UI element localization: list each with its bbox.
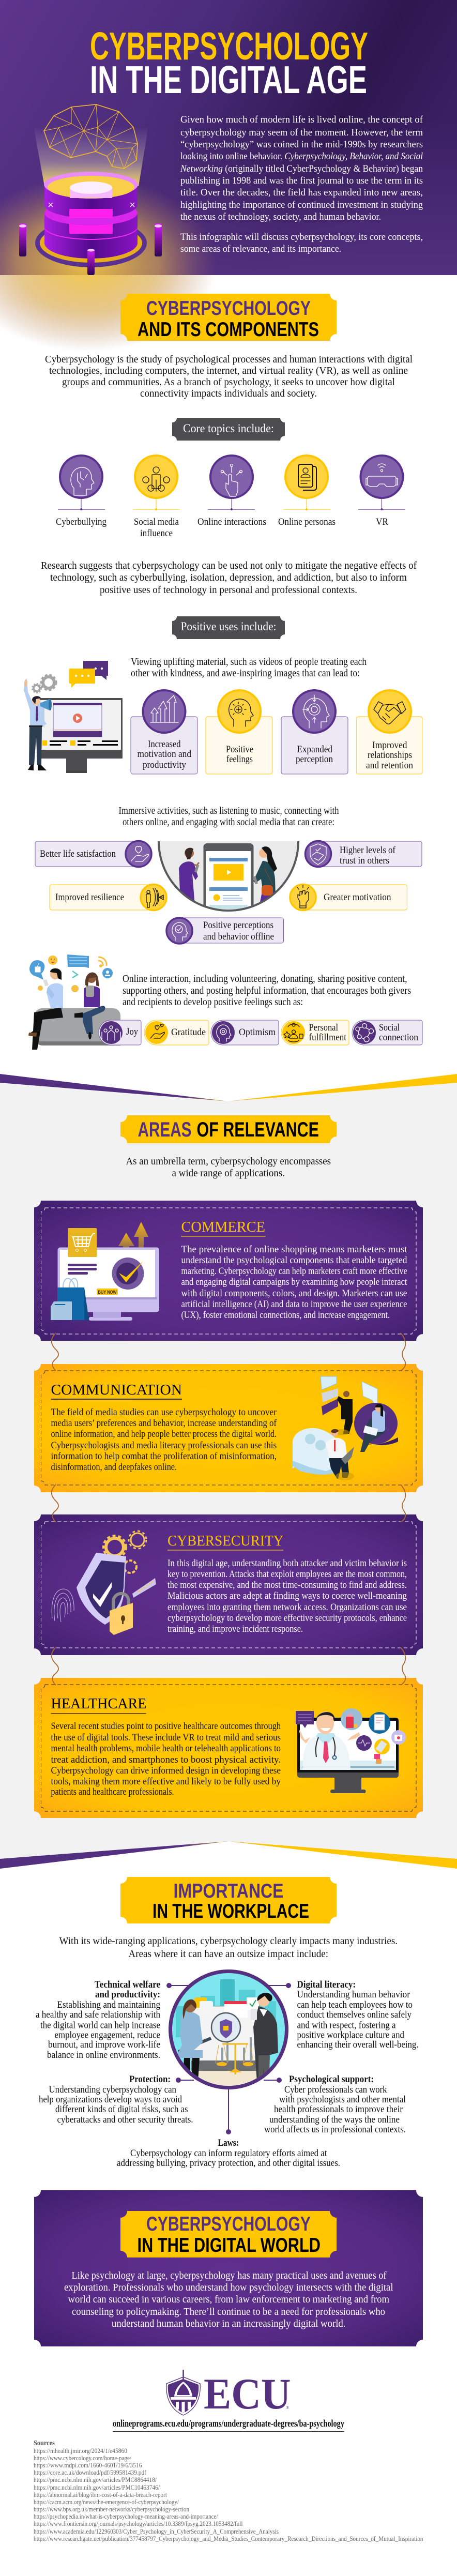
heading and text: communication: Cyberpsychologists and media literacy professionals can use this <box>51 1440 277 1451</box>
card: improved relationships <box>357 690 422 774</box>
card: improved relationships: relationships <box>368 750 412 761</box>
card: positive feelings <box>206 690 272 774</box>
illustration: shield, lock, gears <box>52 1531 156 1635</box>
pill: optimism: Optimism <box>239 1027 276 1038</box>
item: protection: cyberattacks and other security threats. <box>57 2115 193 2125</box>
pill: optimism <box>211 1020 279 1045</box>
closing text: exploration. Professionals who understand how psychology intersects with the digital <box>64 2282 393 2293</box>
heading and text: cybersecurity: CYBERSECURITY <box>167 1533 284 1549</box>
illustration: two people and a phone in half circle <box>159 841 298 918</box>
card: positive feelings: feelings <box>226 754 253 765</box>
heading: areas of relevance: AREAS <box>138 1118 191 1141</box>
immersive benefit pills <box>35 841 422 944</box>
logo: ECU <box>166 2370 291 2418</box>
connectors to the central illustration <box>166 1983 291 2134</box>
pill: higher levels of trust: trust in others <box>340 855 389 866</box>
pill: personal fulfillment <box>281 1020 349 1045</box>
workplace intro text: With its wide-ranging applications, cyberpsychology clearly impacts many industries. <box>59 1936 398 1947</box>
heading and text: communication: media users’ preferences and behavior, increase understanding of <box>51 1418 277 1429</box>
definition text: technologies, including computers, the internet, and virtual reality (VR), as well as online <box>49 366 408 376</box>
label: core topics <box>172 418 285 441</box>
heading: digital world: CYBERPSYCHOLOGY <box>146 2213 311 2235</box>
pill: better life satisfaction: Better life satisfaction <box>40 848 116 859</box>
heading and text: cybersecurity: Malicious actors are adept at finding ways to coerce well-meaning <box>167 1590 407 1601</box>
item: digital literacy: conduct themselves online safely <box>297 2010 412 2020</box>
item: protection <box>39 2074 193 2125</box>
item: technical welfare and productivity <box>36 1980 160 2060</box>
item: digital literacy: and with respect, fostering a <box>297 2021 396 2031</box>
areas intro text <box>126 1156 331 1179</box>
heading and text: commerce: understand the psychological components that enable targeted <box>181 1255 407 1266</box>
panel: cyberpsychology in the digital world <box>34 2190 423 2346</box>
card: improved relationships: Improved <box>372 740 407 751</box>
divider: end of areas band <box>0 1841 457 1869</box>
heading: cyberpsychology and its components <box>120 294 337 341</box>
item: digital literacy: can help teach employees how to <box>297 2000 413 2010</box>
topic: online interactions: Online interactions <box>197 517 266 527</box>
pill: joy <box>99 1020 141 1045</box>
item: protection: different kinds of digital risks, such as <box>55 2104 188 2115</box>
panel: communication <box>34 1364 423 1492</box>
immersive activities text: Immersive activities, such as listening to music, connecting with <box>119 806 339 816</box>
heading and text: cybersecurity: training, and improve incident response. <box>167 1624 303 1634</box>
heading and text: commerce: COMMERCE <box>181 1219 265 1235</box>
closing text: world can succeed in various careers, from law enforcement to marketing and from <box>68 2294 389 2305</box>
card: expanded perception <box>281 690 348 774</box>
pill: greater motivation: Greater motivation <box>324 892 391 903</box>
item: technical welfare and productivity: Technical welfare <box>95 1980 160 1990</box>
heading and text: commerce: with digital components, colors, and design. Marketers can use <box>181 1288 407 1299</box>
workplace intro text: Areas where it can have an outsize impact include: <box>128 1949 328 1960</box>
sources list: https://www.frontiersin.org/journals/psychology/articles/10.3389/fpsyg.2023.1053482/full <box>34 2520 243 2527</box>
heading and text: healthcare <box>51 1695 281 1797</box>
uplifting material text: Viewing uplifting material, such as videos of people treating each <box>131 657 367 668</box>
heading: digital world <box>120 2211 337 2257</box>
pill: personal fulfillment: Personal <box>309 1022 338 1033</box>
intro text: Given how much of modern life is lived online, the concept of <box>180 114 423 125</box>
sources list: https://www.cybercology.com/home-page/ <box>34 2454 131 2462</box>
sources list <box>34 2439 423 2542</box>
item: digital literacy <box>297 1980 419 2050</box>
heading and text: healthcare: patients and healthcare professionals. <box>51 1786 174 1797</box>
heading and text: healthcare: mental health problems, mobile health or telehealth applications to <box>51 1743 281 1754</box>
item: technical welfare and productivity: the digital world can help increase <box>40 2021 160 2031</box>
heading and text: communication: disinformation, and deepfakes online. <box>51 1462 177 1473</box>
illustration: two people on a seat with social icons <box>28 954 120 1050</box>
uplifting material text: other with kindness, and awe-inspiring images that can lead to: <box>131 668 360 679</box>
illustration: people on speech bubbles <box>293 1376 398 1480</box>
illustration: doctor on a monitor <box>296 1708 406 1793</box>
areas of relevance background band <box>0 1074 457 1859</box>
intro text: title. Over the decades, the field has expanded into new areas, <box>180 187 423 198</box>
intro text: cyberpsychology may seem of the moment. However, the term <box>180 127 423 138</box>
research text: technology, such as cyberbullying, isolation, depression, and addiction, but also to inform <box>50 572 407 583</box>
areas intro text: As an umbrella term, cyberpsychology encompasses <box>126 1156 331 1167</box>
topic: online personas <box>278 456 336 527</box>
pill: improved resilience <box>50 884 166 910</box>
heading and text: healthcare: tools, making them more effective and likely to be fully used by <box>51 1776 281 1787</box>
heading and text: cybersecurity: the most expensive, and the most time-consuming to find and address. <box>167 1580 407 1590</box>
heading and text: commerce: The prevalence of online shopping means marketers must <box>181 1244 407 1255</box>
label: core topics: Core topics include: <box>183 422 274 435</box>
pill: social connection: Social <box>379 1022 400 1033</box>
sources list: https://psychopedia.in/what-is-cyberpsychology-meaning-areas-and-importance/ <box>34 2513 218 2520</box>
sources list: https://www.academia.edu/122960303/Cyber_Psychology_in_CyberSecurity_A_Comprehensive_Analysis <box>34 2528 279 2535</box>
item: protection: Understanding cyberpsychology can <box>49 2085 176 2095</box>
heading and text: communication: COMMUNICATION <box>51 1382 182 1398</box>
topic: online interactions <box>197 456 266 527</box>
website link: onlineprograms.ecu.edu/programs/undergraduate-degrees/ba-psychology <box>113 2418 344 2429</box>
intro text: the nexus of technology, society, and human behavior. <box>180 211 381 222</box>
heading and text: healthcare: Cyberpsychology can drive informed design in developing these <box>51 1765 281 1776</box>
pill: higher levels of trust <box>305 841 422 867</box>
item: psychological support: Psychological support: <box>289 2074 374 2085</box>
item: technical welfare and productivity: employee engagement, reduce <box>55 2030 160 2040</box>
item: psychological support: Cyber professionals can work <box>284 2085 387 2095</box>
workplace intro text <box>59 1936 398 1960</box>
illustration: workplace oval with two professionals <box>165 1969 292 2092</box>
card: motivation: productivity <box>143 760 186 770</box>
research text: Research suggests that cyberpsychology can be used not only to mitigate the negative effects of <box>41 560 417 571</box>
heading and text: communication: The field of media studies can use cyberpsychology to uncover <box>51 1407 277 1418</box>
pill: improved resilience: Improved resilience <box>55 892 124 903</box>
pill: joy: Joy <box>126 1026 138 1037</box>
item: technical welfare and productivity: and productivity: <box>95 1990 160 2000</box>
definition text: Cyberpsychology is the study of psychological processes and human interactions with digital <box>45 354 413 365</box>
heading and text: communication: information to help combat the proliferation of misinformation, <box>51 1451 277 1462</box>
item: digital literacy: Understanding human behavior <box>297 1990 410 2000</box>
sources list: Sources <box>34 2439 55 2447</box>
online interaction text: supporting others, and posting helpful information, that encourages both givers <box>123 986 411 996</box>
item: laws: Laws: <box>218 2138 239 2148</box>
pill: higher levels of trust: Higher levels of <box>340 845 396 856</box>
immersive activities text <box>119 806 339 828</box>
logo: ECU: ECU <box>204 2370 291 2418</box>
areas intro text: a wide range of applications. <box>172 1168 285 1179</box>
panel: commerce <box>34 1201 423 1341</box>
online interaction text: Online interaction, including volunteering, donating, sharing positive content, <box>123 974 407 984</box>
illustration: online shop monitor <box>51 1222 159 1321</box>
intro text <box>180 114 423 254</box>
illustration: man with megaphone and monitor <box>24 661 123 773</box>
topic: VR <box>358 456 405 527</box>
pill: better life satisfaction <box>35 841 151 867</box>
title <box>90 24 368 101</box>
online interaction text: and recipients to develop positive feelings such as: <box>123 997 303 1008</box>
topic: social media influence <box>133 456 180 539</box>
heading: importance in the workplace: IN THE WORKPLACE <box>153 1900 309 1922</box>
item: technical welfare and productivity: burnout, and improve work-life <box>48 2040 160 2050</box>
sources list: https://www.mdpi.com/1660-4601/19/6/3516 <box>34 2462 142 2469</box>
item: psychological support: with psychologists and other mental <box>279 2095 406 2105</box>
definition text <box>45 354 413 399</box>
item: technical welfare and productivity: balance in online environments. <box>47 2050 160 2060</box>
logo: ECU: ® <box>286 2405 289 2410</box>
item: digital literacy: Digital literacy: <box>297 1980 356 1990</box>
heading and text: healthcare: HEALTHCARE <box>51 1695 147 1712</box>
heading and text: communication: online information, and help people better process the digital world. <box>51 1429 277 1439</box>
card: motivation <box>131 690 197 774</box>
hero panel <box>0 0 457 352</box>
heading and text: cybersecurity <box>167 1533 407 1634</box>
closing text: Like psychology at large, cyberpsychology has many practical uses and avenues of <box>71 2270 387 2281</box>
intro text: Networking (originally titled CyberPsychology & Behavior) began <box>180 163 423 174</box>
topic: online personas: Online personas <box>278 517 336 527</box>
pillars <box>19 223 162 275</box>
heading: areas of relevance: OF RELEVANCE <box>196 1118 319 1141</box>
sources list: https://www.researchgate.net/publication/377458797_Cyberpsychology_and_Media_Studies_Contemporary_Research_Directions_and_Sources_of_Mutual_Inspiration <box>34 2535 423 2542</box>
core topics row <box>56 456 405 539</box>
item: protection: Protection: <box>129 2074 171 2085</box>
heading and text: cybersecurity: employees into granting them network access. Organizations can use <box>167 1602 407 1613</box>
sources list: https://cacm.acm.org/news/the-emergence-of-cyberpsychology/ <box>34 2498 179 2506</box>
heading and text: healthcare: the use of digital tools. These include VR to treat mild and serious <box>51 1732 281 1743</box>
item: laws: addressing bullying, privacy protection, and other digital issues. <box>117 2158 340 2169</box>
panel: cybersecurity <box>34 1514 423 1655</box>
immersive activities text: others online, and engaging with social media that can create: <box>123 817 334 828</box>
sources list: https://pmc.ncbi.nlm.nih.gov/articles/PMC10463746/ <box>34 2484 160 2491</box>
heading and text: commerce: (UX), foster emotional connections, and increase engagement. <box>181 1310 390 1321</box>
sources list: https://core.ac.uk/download/pdf/599581439.pdf <box>34 2469 147 2476</box>
label: positive uses: Positive uses include: <box>181 620 276 633</box>
pill: social connection: connection <box>379 1032 418 1043</box>
intro text: This infographic will discuss cyberpsychology, its core concepts, <box>180 232 423 243</box>
heading and text: cybersecurity: In this digital age, understanding both attacker and victim behavior is <box>167 1558 407 1569</box>
research text: positive uses of technology in personal and professional contexts. <box>100 585 357 596</box>
label: positive uses <box>172 616 285 639</box>
topic: social media influence: influence <box>140 528 173 539</box>
positive feelings pills <box>99 1020 422 1045</box>
intro text: publishing in 1998 and was the first journal to use the term in its <box>180 175 423 186</box>
item: technical welfare and productivity: Establishing and maintaining <box>57 2000 160 2010</box>
item: psychological support: world affects us in professional contexts. <box>264 2125 406 2135</box>
pill: personal fulfillment: fulfillment <box>309 1032 347 1043</box>
intro text: highlighting the importance of continued investment in studying <box>180 200 423 210</box>
intro text: “cyberpsychology” was coined in the mid-1990s by researchers <box>180 139 423 150</box>
intro text: some areas of relevance, and its importance. <box>180 244 341 254</box>
sources list: https://abnormal.ai/blog/ibm-cost-of-a-data-breach-report <box>34 2491 167 2498</box>
pill: social connection <box>352 1020 422 1045</box>
closing text: counseling to policymaking. There’ll continue to be a need for professionals who <box>72 2306 385 2317</box>
card: improved relationships: and retention <box>366 760 413 771</box>
definition text: connectivity impacts individuals and society. <box>140 388 317 399</box>
pill: gratitude <box>144 1020 209 1045</box>
topic: social media influence: Social media <box>134 517 179 527</box>
item: psychological support: health professionals to improve their <box>274 2104 403 2115</box>
sources list: https://mhealth.jmir.org/2024/1/e45860 <box>34 2447 127 2454</box>
pill: positive perceptions <box>166 918 283 944</box>
card: expanded perception: perception <box>296 754 333 765</box>
item: psychological support: understanding of the ways the online <box>269 2115 400 2125</box>
card: expanded perception: Expanded <box>297 744 332 755</box>
sources list: https://www.bps.org.uk/member-networks/cyberpsychology-section <box>34 2506 190 2513</box>
topic: cyberbullying <box>56 456 106 527</box>
closing text <box>64 2270 393 2329</box>
heading: cyberpsychology and its components: AND ITS COMPONENTS <box>138 319 319 341</box>
ropes between panels <box>52 1333 406 1685</box>
online interaction text <box>123 974 411 1008</box>
heading and text: cybersecurity: key to prevention. Attacks that exploit employees are the most common, <box>167 1569 407 1580</box>
card: positive feelings: Positive <box>226 744 253 755</box>
pill: positive perceptions: Positive perceptions <box>203 920 273 931</box>
heading: importance in the workplace <box>120 1877 337 1923</box>
item: technical welfare and productivity: a healthy and safe relationship with <box>36 2010 160 2020</box>
heading: cyberpsychology and its components: CYBERPSYCHOLOGY <box>146 297 311 320</box>
card: motivation: motivation and <box>138 749 191 760</box>
item: laws: Cyberpsychology can inform regulatory efforts aimed at <box>130 2148 327 2159</box>
item: digital literacy: positive workplace culture and <box>297 2030 405 2040</box>
illustration: online shop monitor: BUY NOW <box>98 1290 117 1295</box>
pill: gratitude: Gratitude <box>171 1027 206 1038</box>
heading: areas of relevance <box>120 1115 337 1143</box>
intro text: looking into online behavior. Cyberpsychology, Behavior, and Social <box>180 151 423 162</box>
heading and text: commerce: artificial intelligence (AI) and data to improve the user experience <box>181 1299 407 1310</box>
heading and text: healthcare: Several recent studies point to positive healthcare outcomes through <box>51 1721 281 1732</box>
heading and text: healthcare: treat addiction, and smartphones to boost physical activity. <box>51 1754 281 1765</box>
panel: healthcare <box>34 1678 423 1818</box>
heading and text: commerce: and engaging digital campaigns by examining how people interact <box>181 1277 407 1287</box>
research text <box>41 560 417 596</box>
item: digital literacy: enhancing their overall well-being. <box>297 2040 419 2050</box>
definition text: groups and communities. As a branch of psychology, it seeks to uncover how digital <box>62 377 395 388</box>
heading and text: commerce: marketing. Cyberpsychology can help marketers craft more effective <box>181 1266 407 1277</box>
card: motivation: Increased <box>148 739 181 750</box>
topic: cyberbullying: Cyberbullying <box>56 517 106 527</box>
illustration: brain hologram on a glowing cylinder <box>19 104 162 275</box>
pill: greater motivation <box>290 884 407 910</box>
topic: VR: VR <box>376 517 388 527</box>
uplifting material text <box>131 657 367 679</box>
sources list: https://pmc.ncbi.nlm.nih.gov/articles/PMC8864418/ <box>34 2476 157 2483</box>
heading: importance in the workplace: IMPORTANCE <box>174 1880 283 1902</box>
heading: digital world: IN THE DIGITAL WORLD <box>138 2234 321 2256</box>
item: psychological support <box>264 2074 406 2135</box>
pill: positive perceptions: and behavior offline <box>203 931 274 942</box>
item: laws <box>117 2138 340 2169</box>
closing text: understand human behavior in an increasingly digital world. <box>112 2318 345 2329</box>
item: protection: help organizations develop ways to avoid <box>39 2095 182 2105</box>
heading and text: communication <box>51 1382 277 1473</box>
uplifting benefit cards <box>131 690 422 774</box>
heading and text: commerce <box>181 1219 407 1321</box>
heading and text: cybersecurity: cyberpsychology to develop more effective security protocols, enhance <box>167 1613 407 1624</box>
